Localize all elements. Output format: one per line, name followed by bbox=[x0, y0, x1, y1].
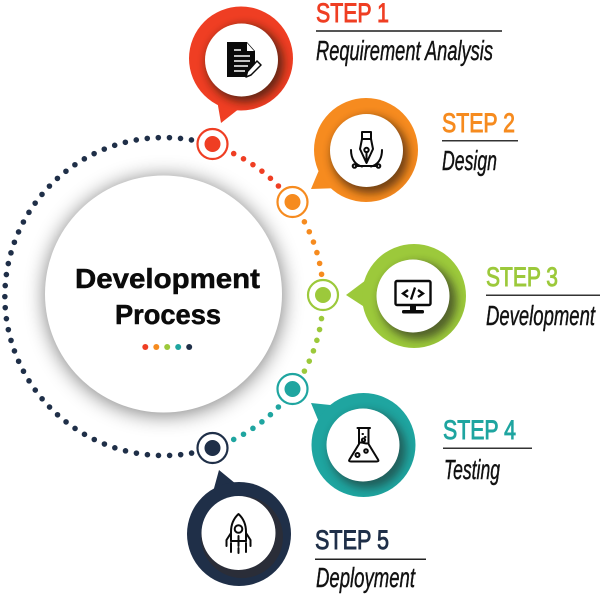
label: step 2: Design bbox=[442, 145, 497, 176]
bubble: step 4 bbox=[311, 393, 416, 497]
label: step 5 bbox=[315, 525, 426, 593]
icon: rocket bbox=[226, 514, 250, 553]
icon: document with pencil bbox=[227, 42, 261, 77]
label: step 2: STEP 2 bbox=[442, 108, 515, 138]
node 5 bbox=[198, 433, 228, 463]
label: step 5: STEP 5 bbox=[315, 525, 389, 555]
node 3 bbox=[308, 280, 338, 310]
bubble: step 5 bbox=[187, 470, 291, 586]
bubble: step 3 bbox=[346, 244, 466, 348]
center disk: Development Process bbox=[45, 176, 283, 415]
label: step 4: STEP 4 bbox=[443, 415, 516, 445]
label: step 1: Requirement Analysis bbox=[316, 35, 493, 66]
label: step 2 bbox=[442, 108, 518, 176]
icon: flask bbox=[349, 428, 378, 462]
label: step 5: Deployment bbox=[316, 562, 416, 593]
node 1 bbox=[198, 129, 228, 159]
icon: monitor with code bbox=[396, 281, 430, 314]
label: step 1 bbox=[316, 0, 502, 66]
node 4 bbox=[278, 374, 308, 404]
node 2 bbox=[278, 187, 308, 217]
label: step 3 bbox=[486, 262, 600, 331]
bubble: step 2 bbox=[311, 98, 418, 202]
icon: pen tool bbox=[351, 132, 382, 168]
label: step 4 bbox=[443, 415, 532, 485]
center colored dots bbox=[142, 344, 192, 350]
label: step 4: Testing bbox=[444, 454, 500, 485]
bubble: step 1 bbox=[189, 6, 293, 123]
center title bbox=[75, 263, 260, 330]
dotted ring bbox=[5, 138, 322, 456]
label: step 3: STEP 3 bbox=[486, 262, 558, 292]
center title: Development bbox=[75, 263, 260, 294]
center title: Process bbox=[115, 299, 221, 330]
